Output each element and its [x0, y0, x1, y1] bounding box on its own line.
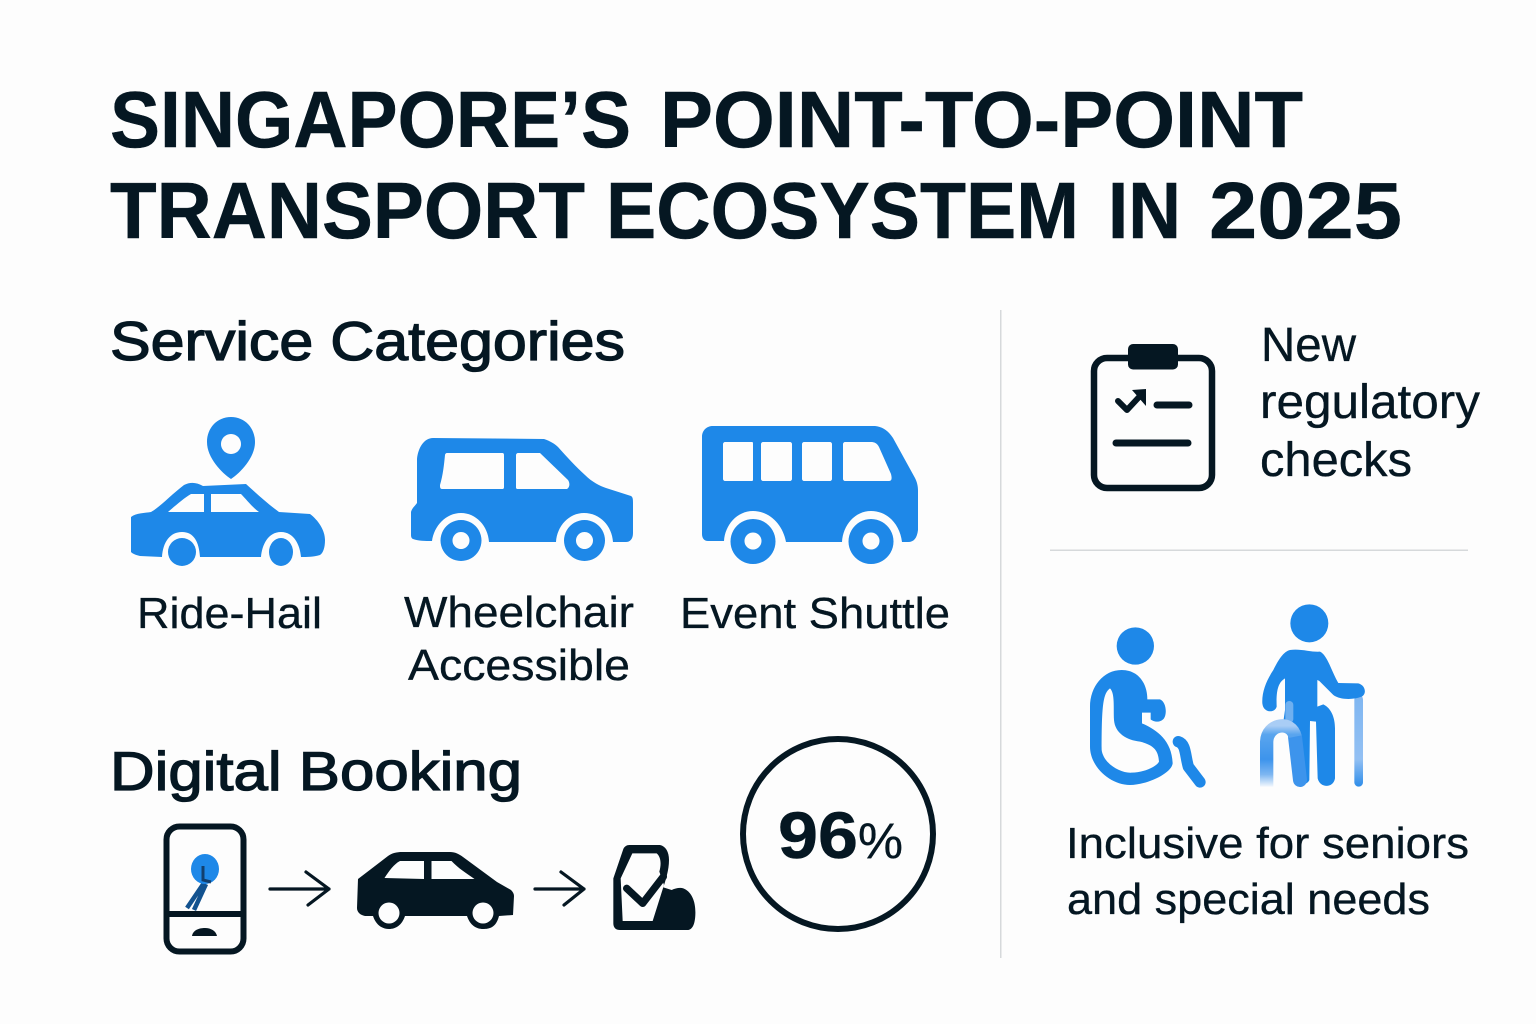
text: inclusive for seniors and special needs: and special needs	[1067, 875, 1430, 924]
label: ride-hail: Ride-Hail	[137, 589, 322, 638]
heading: service categories: Service Categories	[110, 310, 625, 372]
arrow: car to confirmation	[535, 872, 584, 905]
icon: ride-hail car with location pin	[131, 417, 325, 566]
title: TRANSPORT	[110, 166, 585, 255]
title: IN	[1108, 166, 1181, 255]
text: new regulatory checks: checks	[1260, 434, 1412, 487]
text: inclusive for seniors and special needs: Inclusive for seniors	[1066, 819, 1469, 868]
panel: inclusive access	[1066, 604, 1469, 924]
label: wheelchair accessible: Wheelchair	[404, 588, 634, 637]
title: POINT-TO-POINT	[660, 75, 1303, 164]
icon: wheelchair user	[1090, 627, 1200, 785]
icon: car	[357, 852, 514, 929]
icon: clipboard checklist	[1094, 344, 1212, 488]
icon: confirmation check	[613, 845, 695, 930]
stat circle: 96%: 96	[778, 798, 858, 872]
panel: new regulatory checks	[1094, 319, 1480, 488]
icon: event shuttle bus	[702, 426, 918, 564]
title: 2025	[1209, 166, 1402, 255]
icon: wheelchair accessible van	[411, 438, 633, 561]
stat circle: 96%	[743, 739, 933, 929]
text: new regulatory checks: regulatory	[1260, 376, 1480, 429]
title: SINGAPORE’S	[110, 75, 631, 164]
panel: digital booking	[110, 739, 933, 952]
icon: phone with blue map pin	[166, 826, 244, 952]
title: ECOSYSTEM	[606, 166, 1079, 255]
title	[110, 75, 1402, 255]
arrow: phone to car	[270, 872, 329, 905]
text: inclusive for seniors and special needs	[1066, 819, 1469, 924]
text: new regulatory checks	[1260, 319, 1480, 487]
panel: service categories	[110, 310, 950, 690]
label: event shuttle: Event Shuttle	[680, 589, 950, 638]
icon: senior with cane	[1262, 604, 1365, 787]
heading: digital booking: Digital Booking	[110, 740, 522, 802]
label: wheelchair accessible	[404, 588, 634, 690]
label: wheelchair accessible: Accessible	[408, 641, 630, 690]
stat circle: 96%: %	[858, 813, 903, 869]
text: new regulatory checks: New	[1261, 319, 1356, 372]
